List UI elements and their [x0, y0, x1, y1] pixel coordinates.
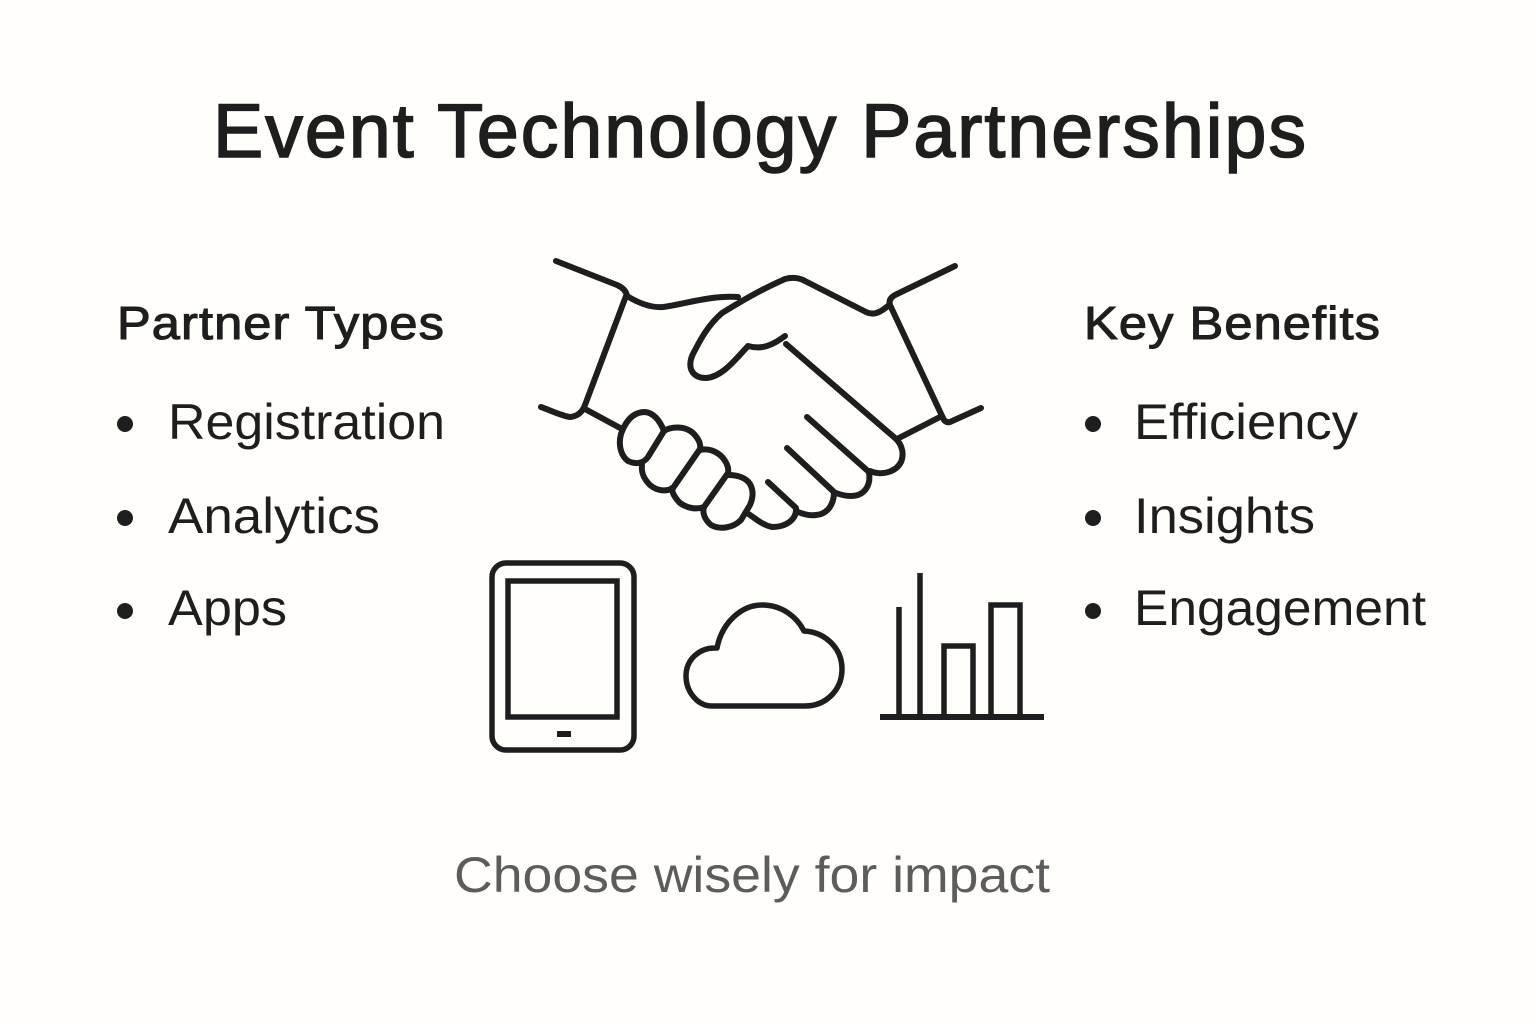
list: key benefits: Insights [1134, 488, 1315, 544]
list: partner types: Analytics [168, 488, 380, 544]
icon: handshake [541, 261, 981, 528]
list: partner types [117, 394, 445, 636]
icon: tablet [492, 563, 634, 750]
panel: key benefits [1084, 297, 1426, 636]
icon: bar chart [880, 573, 1044, 717]
list: partner types: Apps [168, 580, 287, 636]
footer tagline: Choose wisely for impact [454, 847, 1050, 903]
panel: partner types [117, 297, 445, 636]
heading: partner types: Partner Types [117, 297, 445, 349]
list: key benefits: Efficiency [1134, 394, 1358, 450]
list: key benefits [1085, 394, 1426, 636]
list: key benefits: Engagement [1134, 580, 1426, 636]
icon: cloud [686, 605, 842, 706]
title: Event Technology Partnerships [213, 89, 1308, 174]
list: partner types: Registration [168, 394, 445, 450]
heading: key benefits: Key Benefits [1084, 297, 1381, 349]
